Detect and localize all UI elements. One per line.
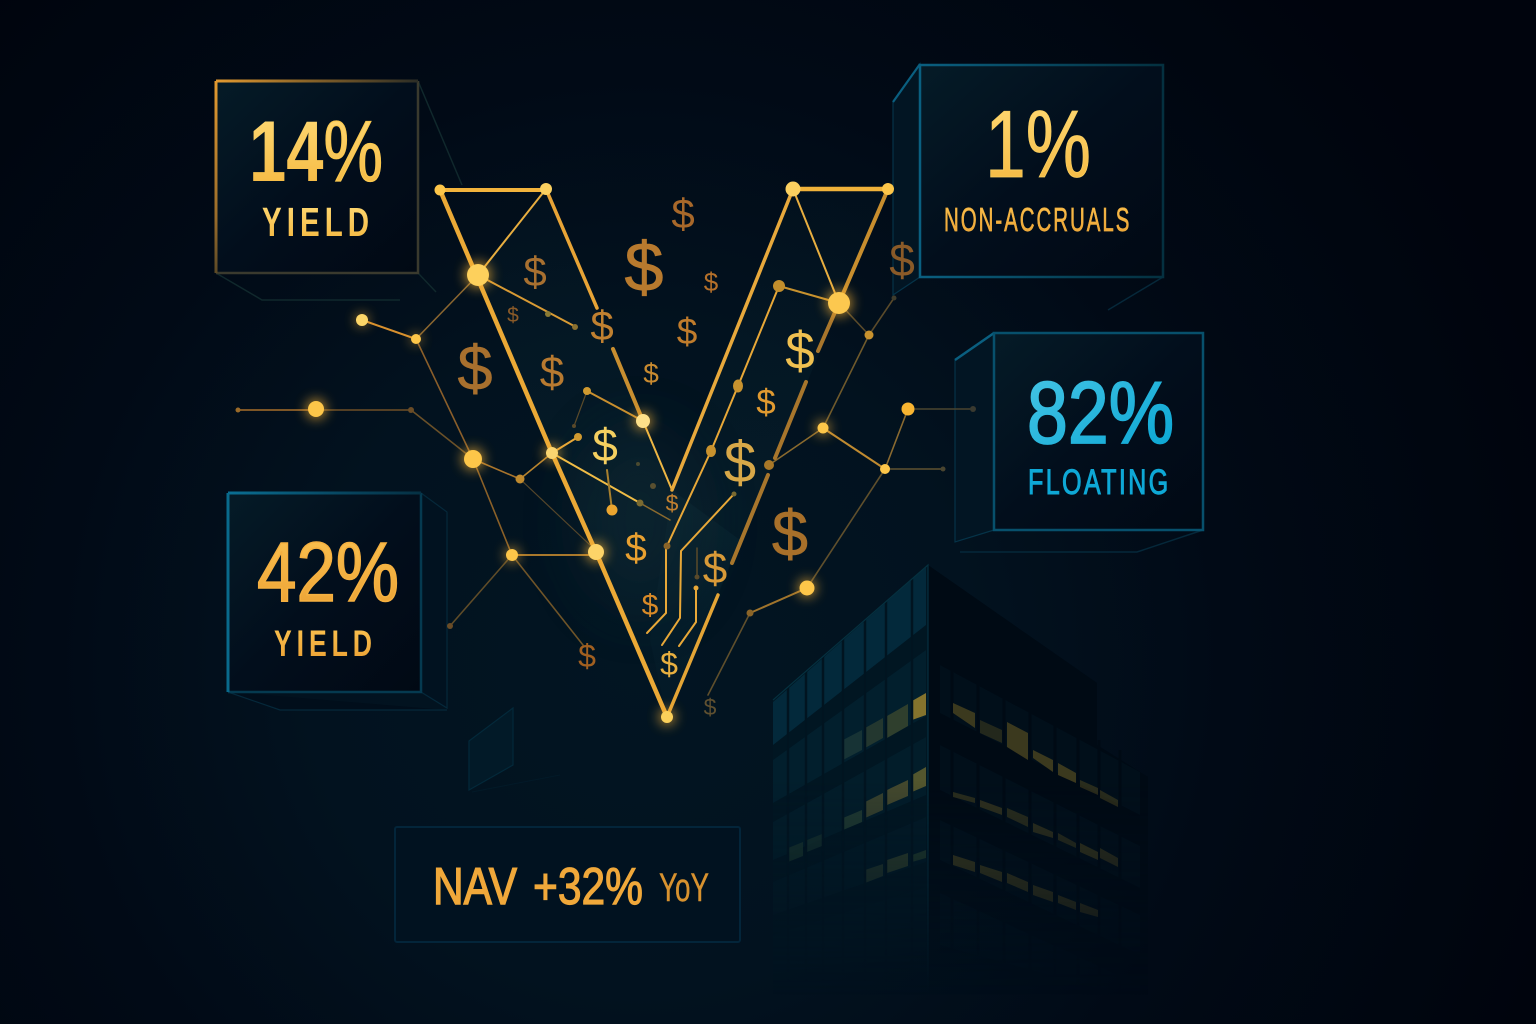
left face mullions (786, 578, 914, 883)
dollar sign icons: $ (578, 638, 596, 674)
value: 1% (985, 91, 1091, 198)
small floating panel (469, 708, 560, 792)
dollar sign icons: $ (523, 248, 547, 295)
dollar sign icons: $ (625, 228, 663, 306)
inner thin lines (478, 189, 839, 646)
YoY label: YoY (659, 866, 709, 910)
right face mullions (952, 660, 1120, 1000)
label: YIELD (274, 623, 377, 664)
dollar sign icons: $ (703, 544, 727, 593)
panel: NAV growth (395, 827, 740, 942)
box (395, 827, 740, 942)
bright nodes (308, 182, 914, 723)
dollar sign icons: $ (704, 694, 717, 720)
dollar sign icons: $ (677, 311, 697, 352)
box side faces (955, 333, 994, 542)
value: 82% (1027, 363, 1174, 462)
V outline: inner left stroke (546, 189, 643, 421)
dollar sign icons: $ (642, 589, 659, 622)
dollar sign icons: $ (666, 490, 679, 516)
right face lit window strips (953, 703, 1118, 917)
dollar sign icons: $ (704, 267, 719, 297)
label: FLOATING (1028, 463, 1171, 502)
dollar sign icons (457, 190, 915, 720)
+32% value: +32% (533, 858, 643, 916)
building right face (928, 566, 1077, 844)
dollar sign icons: $ (507, 304, 519, 327)
dollar sign icons: $ (590, 302, 614, 349)
network connector lines (238, 189, 973, 717)
box front (216, 81, 418, 273)
dollar sign icons: $ (671, 190, 695, 237)
dollar sign icons: $ (756, 383, 776, 422)
V outline: right stroke (667, 189, 888, 717)
left network (238, 275, 596, 645)
node glows (306, 262, 852, 725)
panel: 1% non-accruals (893, 64, 1163, 310)
network nodes (236, 182, 976, 723)
box front (920, 65, 1163, 277)
building corner edge (773, 565, 928, 1000)
dollar sign icons: $ (625, 527, 647, 570)
office building (772, 564, 1118, 944)
V outline: left stroke (440, 190, 667, 717)
value: 14% (249, 104, 383, 200)
box front (228, 493, 421, 692)
right face windows (940, 665, 1140, 1000)
NAV label: NAV (433, 858, 517, 916)
V arm tint fills (478, 189, 888, 717)
left face lit window patches (788, 693, 926, 883)
label: YIELD (262, 199, 374, 245)
dollar sign icons: $ (457, 334, 493, 404)
dollar sign icons: $ (540, 348, 564, 397)
dollar sign icons: $ (643, 358, 659, 389)
muted nodes (236, 280, 976, 629)
dollar sign icons: $ (660, 646, 678, 682)
box front (994, 333, 1203, 530)
panel: 14% yield (216, 81, 462, 300)
dollar sign icons: $ (592, 419, 618, 471)
value: 42% (257, 525, 399, 619)
dollar sign icons: $ (889, 234, 915, 286)
box side faces (421, 493, 447, 708)
box side faces (893, 64, 920, 295)
panel: 42% yield (228, 493, 447, 710)
label: NON-ACCRUALS (944, 201, 1131, 238)
panel: 82% floating (955, 333, 1203, 552)
building left face (773, 565, 928, 1000)
dollar sign icons: $ (785, 322, 815, 381)
left face glass rows (773, 568, 926, 802)
right network (708, 298, 973, 695)
box side faces (216, 81, 462, 300)
dollar sign icons: $ (772, 497, 808, 570)
dollar sign icons: $ (724, 430, 756, 495)
V outline: inner right stroke (672, 189, 793, 490)
